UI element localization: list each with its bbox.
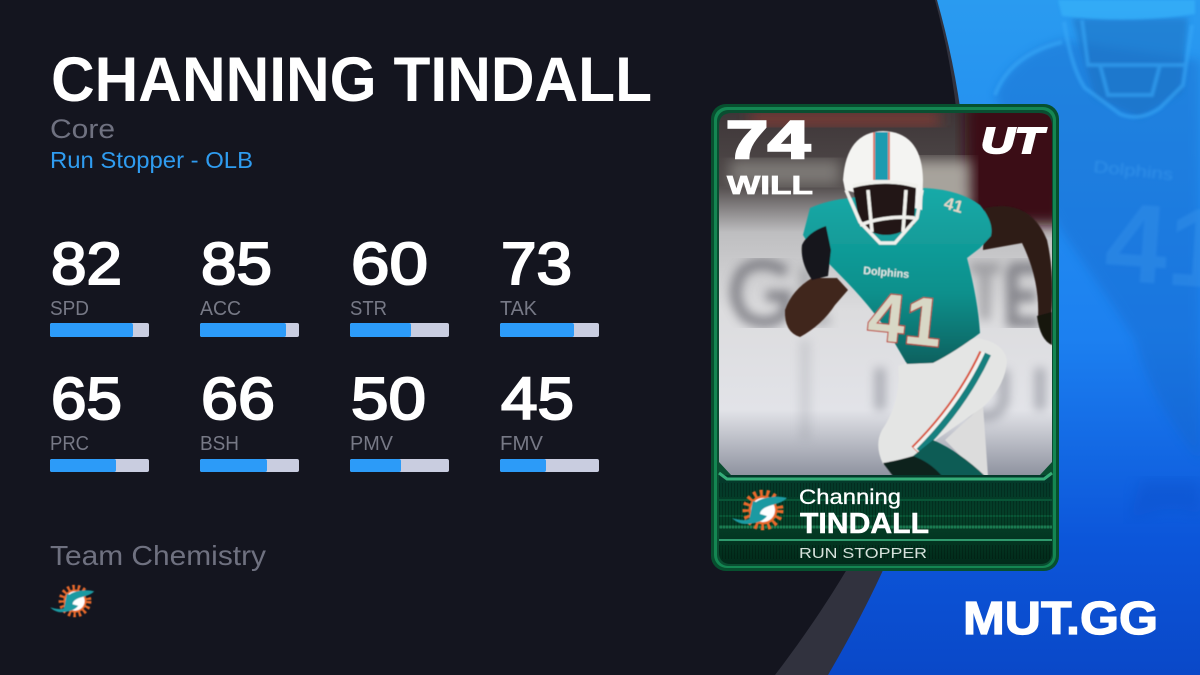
- stat: TAK: 73: [501, 231, 572, 297]
- stat: SPD: SPD: [50, 298, 89, 320]
- stat: ACC: ACC: [200, 298, 241, 320]
- photo: player: [785, 131, 1052, 476]
- jersey wordmark: Dolphins: [863, 265, 910, 281]
- stat: FMV: 45: [501, 366, 574, 432]
- stat: BSH: [200, 366, 299, 472]
- card position: WILL: [727, 170, 813, 200]
- stat: TAK: [500, 231, 599, 337]
- icon: dolphins logo: [732, 493, 787, 527]
- card first name: Channing: [799, 486, 901, 509]
- nameplate top edge: [719, 473, 1052, 479]
- title: CHANNING TINDALL: [51, 45, 652, 115]
- stat: PRC: [50, 366, 149, 472]
- player card: [711, 100, 1065, 571]
- stat: PMV: [350, 366, 449, 472]
- stat: PRC: PRC: [50, 433, 89, 455]
- rear leg: [945, 405, 988, 476]
- card overall rating: 74: [726, 111, 811, 170]
- stat: STR: 60: [351, 231, 428, 297]
- subtitle: archetype: Run Stopper - OLB: [50, 147, 253, 173]
- stat: BSH: BSH: [200, 433, 239, 455]
- heading: team chemistry: Team Chemistry: [50, 540, 266, 571]
- card photo: [719, 100, 1065, 476]
- helmet: [843, 131, 923, 210]
- subtitle: program: Core: [50, 114, 115, 144]
- card nameplate: [719, 475, 1052, 565]
- stat: PMV: 50: [351, 366, 426, 432]
- stat: STR: STR: [350, 298, 387, 320]
- shoulder number: 41: [942, 194, 965, 217]
- icon: dolphins logo small: [50, 587, 94, 615]
- card UT badge: UT: [981, 120, 1047, 161]
- stat: BSH: 66: [201, 366, 275, 432]
- logo: MUT.GG: MUT.GG: [963, 592, 1158, 644]
- stat: ACC: [200, 231, 299, 337]
- left arm: [785, 278, 848, 337]
- stat: TAK: TAK: [500, 298, 538, 320]
- card last name: TINDALL: [800, 508, 929, 540]
- stat: FMV: FMV: [500, 433, 544, 455]
- card frame: [711, 104, 1059, 571]
- face and mask: [853, 183, 916, 235]
- pants: [878, 338, 1007, 464]
- background: ghost player image: [995, 0, 1200, 520]
- right arm: [982, 206, 1052, 316]
- stat: SPD: 82: [51, 231, 122, 297]
- stat: STR: [350, 231, 449, 337]
- card archetype: RUN STOPPER: [799, 545, 927, 562]
- stat: PRC: 65: [51, 366, 122, 432]
- stat: FMV: [500, 366, 599, 472]
- stat: PMV: PMV: [350, 433, 394, 455]
- nameplate divider: [719, 539, 1052, 541]
- photo: blurred stadium background: [719, 100, 1065, 475]
- jersey number: 41: [864, 278, 946, 362]
- glove: [802, 226, 831, 280]
- stat: ACC: 85: [201, 231, 272, 297]
- background: ghost player image: Dolphins: [1093, 157, 1174, 184]
- socks and shoe: [913, 440, 985, 476]
- jersey: [803, 188, 992, 364]
- stat: SPD: [50, 231, 149, 337]
